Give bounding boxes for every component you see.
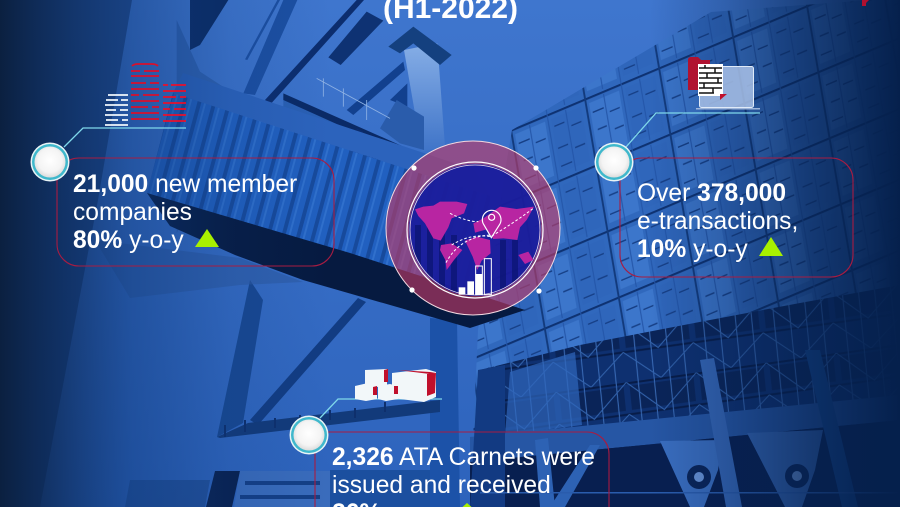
connector line — [626, 113, 760, 147]
central globe emblem — [386, 141, 560, 315]
world map — [415, 202, 534, 270]
container underside — [147, 193, 525, 328]
central crane column — [430, 318, 460, 507]
outer crimson ring — [386, 141, 560, 315]
callout text: 2,326 ATA Carnets were — [332, 444, 595, 471]
container stacks — [470, 0, 900, 507]
up triangle — [195, 229, 219, 247]
icon: documents — [105, 64, 186, 125]
callout text: issued and received — [332, 472, 551, 499]
callout text: companies — [73, 199, 192, 226]
icon: cargo boxes — [355, 369, 436, 402]
crane upper structure — [177, 0, 452, 233]
flight routes — [446, 208, 533, 263]
corner red mark — [862, 0, 869, 6]
callout box — [57, 158, 334, 266]
callout text: e-transactions, — [637, 208, 798, 235]
bar chart — [459, 259, 491, 295]
callout text: Over 378,000 — [637, 180, 786, 207]
photo fades — [0, 0, 132, 507]
inner blue disc — [409, 164, 541, 296]
panel: e-transactions — [594, 57, 853, 277]
up triangle — [462, 503, 472, 507]
panel: new member companies — [30, 64, 334, 266]
callout box — [315, 432, 609, 507]
crane container — [147, 93, 490, 305]
ring nodes — [409, 165, 542, 294]
lower-left crane strut and ground — [217, 280, 263, 437]
panel: ATA Carnets — [290, 369, 609, 507]
icon: laptop and document — [688, 57, 760, 110]
location pin — [482, 210, 501, 238]
callout text: 80% y-o-y — [73, 227, 184, 254]
node marker — [594, 142, 634, 182]
callout text: 10% y-o-y — [637, 236, 748, 263]
up triangle — [759, 237, 783, 256]
node marker — [30, 142, 70, 182]
machinery deck — [470, 285, 900, 507]
connector line — [320, 399, 442, 418]
connector line — [64, 128, 186, 147]
callout text: 21,000 new member — [73, 171, 297, 198]
node marker — [290, 416, 328, 454]
refrigerated units — [660, 440, 723, 507]
callout box — [620, 158, 853, 277]
